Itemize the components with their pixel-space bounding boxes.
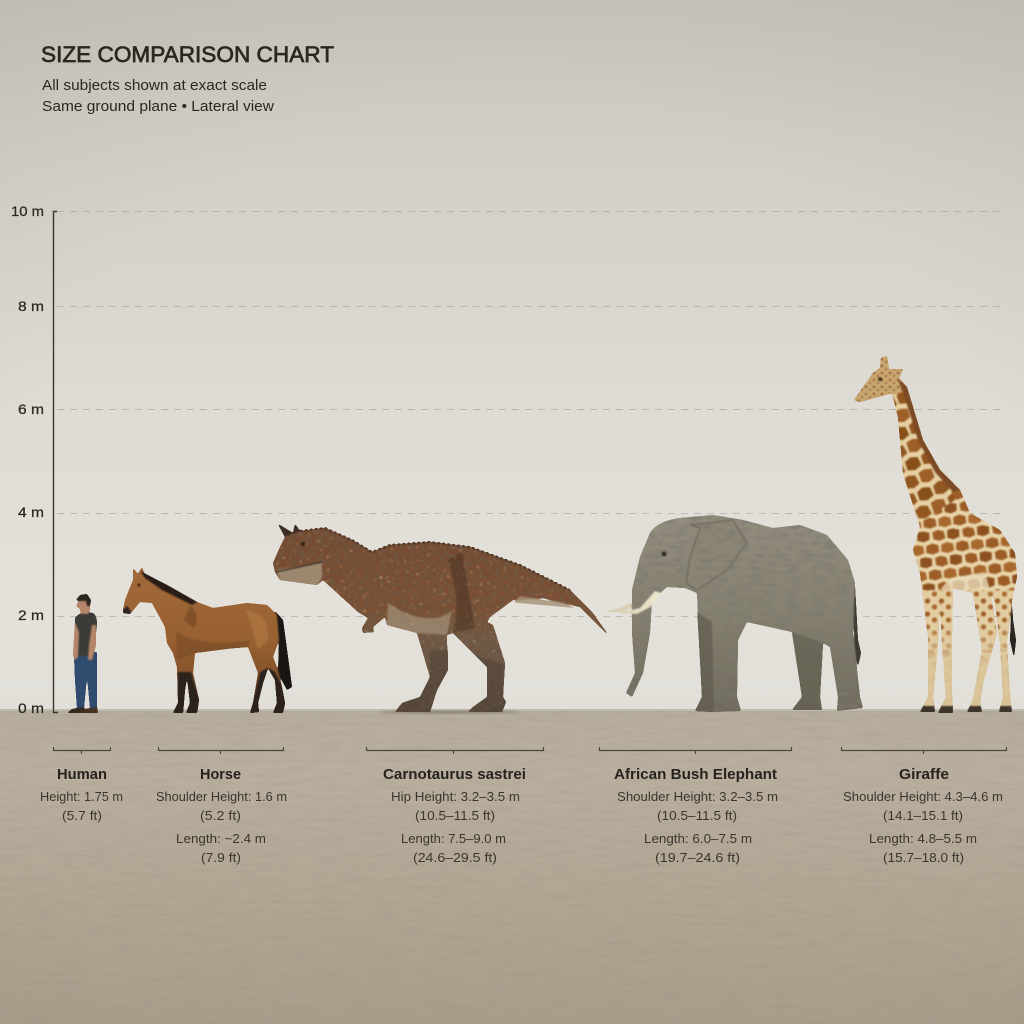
elephant body [626,515,863,712]
label: giraffe [843,767,1003,865]
giraffe mane [897,378,960,492]
label: elephant: African Bush Elephant [614,767,777,783]
label: carnotaurus [383,767,526,865]
label: carnotaurus: Length: 7.5–9.0 m [401,832,506,846]
carnotaurus dorsal ridge [300,528,570,590]
giraffe neck [892,392,956,524]
height scale axis: 8 m [18,298,44,314]
bracket: elephant [600,747,792,754]
bracket: giraffe [842,747,1006,754]
horse body [123,567,285,713]
giraffe head [854,356,906,402]
carnotaurus lower legs [395,650,506,712]
giraffe belly [940,572,990,590]
height scale axis: 0 m [18,700,44,716]
label: horse [156,767,287,865]
label: giraffe: Giraffe [899,767,949,783]
bracket: horse [158,747,284,754]
label: horse: Shoulder Height: 1.6 m [156,790,287,804]
bracket: human [54,747,110,754]
elephant ear [686,520,747,590]
title: SIZE COMPARISON CHART [41,42,334,67]
background wall [0,0,1024,712]
figure: giraffe [850,355,1020,715]
label: horse: (5.2 ft) [200,809,241,823]
height scale axis: 4 m [18,504,44,520]
horse tail [275,611,292,690]
subtitle [42,78,275,115]
horse mane [140,571,197,605]
carnotaurus belly [387,603,452,635]
label: elephant: Length: 6.0–7.5 m [644,832,752,846]
horse lower legs [173,672,199,713]
label: human: Human [57,767,107,783]
ground plane [0,709,1024,1024]
label: horse: Horse [200,767,241,783]
horse shading [176,632,250,660]
height scale axis: 10 m [11,203,44,219]
figure: African bush elephant [604,515,863,712]
label: human [40,767,123,823]
label: carnotaurus: (10.5–11.5 ft) [415,809,495,823]
label: elephant: Shoulder Height: 3.2–3.5 m [617,790,778,804]
label: horse: (7.9 ft) [201,851,241,865]
subtitle: All subjects shown at exact scale [42,78,267,94]
label: elephant: (19.7–24.6 ft) [655,851,740,865]
carnotaurus body [273,524,610,712]
label: human: (5.7 ft) [62,809,102,823]
label: giraffe: (15.7–18.0 ft) [883,851,964,865]
near tusk [617,591,661,614]
elephant far legs [695,612,714,712]
label: giraffe: Shoulder Height: 4.3–4.6 m [843,790,1003,804]
bracket: carnotaurus [366,747,544,754]
giraffe lower legs [920,624,1012,713]
label: horse: Length: ~2.4 m [176,832,266,846]
figure: Carnotaurus sastrei [273,524,610,714]
label: elephant: (10.5–11.5 ft) [657,809,737,823]
far tusk [604,603,633,612]
label: carnotaurus: Carnotaurus sastrei [383,767,526,783]
figure: human [67,594,98,713]
figure: horse [123,567,292,713]
height scale axis: 6 m [18,401,44,417]
height scale axis: 2 m [18,607,44,623]
label: human: Height: 1.75 m [40,790,123,804]
label: elephant [614,767,778,865]
carnotaurus jaw [277,562,322,585]
carnotaurus horns [278,524,300,537]
giraffe tail [1010,600,1016,658]
label: giraffe: (14.1–15.1 ft) [883,809,963,823]
label: giraffe: Length: 4.8–5.5 m [869,832,977,846]
carnotaurus thigh shadow [448,552,475,633]
giraffe upper legs [915,590,1015,650]
elephant tail [853,585,861,667]
giraffe body [850,355,1020,715]
height scale axis [11,203,1000,716]
label: carnotaurus: (24.6–29.5 ft) [413,851,497,865]
label: carnotaurus: Hip Height: 3.2–3.5 m [391,790,520,804]
subtitle: Same ground plane • Lateral view [42,99,275,115]
